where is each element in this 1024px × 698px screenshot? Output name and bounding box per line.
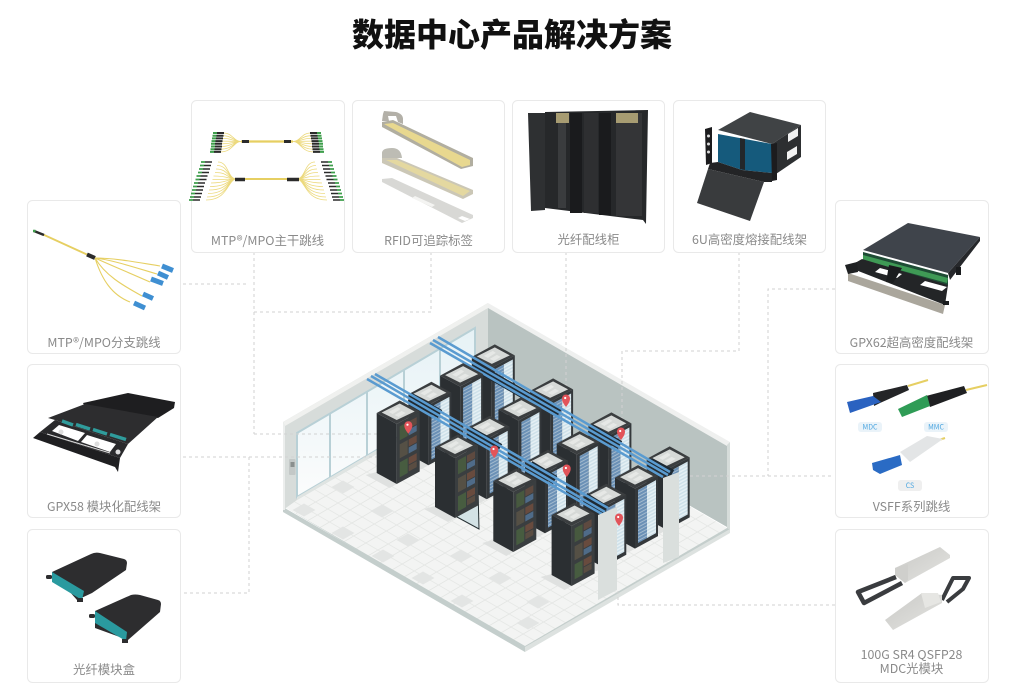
back-right wall (488, 303, 730, 530)
icon: GPX62 chassis (845, 223, 980, 314)
rack row C (429, 363, 658, 553)
caption: MDC光模块 (880, 659, 943, 677)
caption: GPX62超高密度配线架 (850, 333, 973, 351)
rack row D (461, 344, 690, 534)
panel: 6U high-density splice frame (674, 100, 826, 252)
panel: VSFF series patch cords (836, 364, 988, 518)
panel: 100G SR4 QSFP28 MDC transceiver (836, 530, 988, 682)
icon: MMC connector (898, 385, 987, 417)
icon: trunk cables (189, 133, 344, 200)
icon: fan-out cable (33, 231, 173, 308)
panel: MTP/MPO fan-out cable (28, 200, 180, 354)
rack row B (397, 382, 626, 571)
connector dashes inside room area (183, 252, 833, 476)
pill: MDC (858, 422, 882, 432)
open glass door (457, 447, 479, 529)
icon: CS connector (872, 436, 945, 474)
caption (861, 645, 963, 677)
panel: MTP/MPO trunk cable (189, 100, 344, 252)
icon: module boxes (46, 553, 161, 643)
icon: RFID strips (382, 111, 473, 223)
pill: CS (898, 480, 922, 491)
panel: fiber cabinet (512, 100, 664, 252)
floor (283, 390, 730, 652)
back-left wall with windows (283, 303, 488, 510)
dashed connector lines (181, 252, 835, 605)
caption: MTP®/MPO主干跳线 (211, 231, 324, 249)
cable tray front (367, 374, 608, 514)
panel: RFID tags (352, 100, 504, 252)
caption: 100G SR4 QSFP28 (861, 645, 963, 663)
caption: 光纤配线柜 (558, 230, 619, 248)
rack row A (366, 400, 595, 590)
title: 数据中心产品解决方案 (352, 10, 672, 56)
icon: 6U chassis (697, 112, 801, 221)
caption: GPX58 模块化配线架 (47, 497, 161, 515)
panel: GPX62 ultra-high density frame (836, 200, 988, 354)
pill: MDC: MDC (863, 422, 878, 432)
icon: QSFP modules (858, 547, 969, 630)
caption: VSFF系列跳线 (873, 497, 950, 515)
caption: 光纤模块盒 (73, 660, 136, 678)
room: data center (183, 252, 833, 652)
icon: MDC connector (847, 380, 928, 413)
pill: MMC (924, 422, 948, 432)
caption: RFID可追踪标签 (384, 231, 473, 249)
icon: cabinet (528, 110, 648, 224)
panel: GPX58 modular patch panel (28, 364, 180, 518)
panel: fiber module box (28, 530, 180, 682)
pill: MMC: MMC (928, 422, 944, 432)
pill: CS: CS (906, 481, 914, 491)
cable tray rear (430, 337, 672, 477)
icon: GPX58 tray (33, 393, 175, 472)
caption: 6U高密度熔接配线架 (692, 230, 807, 248)
pillars (598, 472, 679, 600)
location pins (404, 394, 625, 526)
caption: MTP®/MPO分支跳线 (47, 333, 161, 351)
